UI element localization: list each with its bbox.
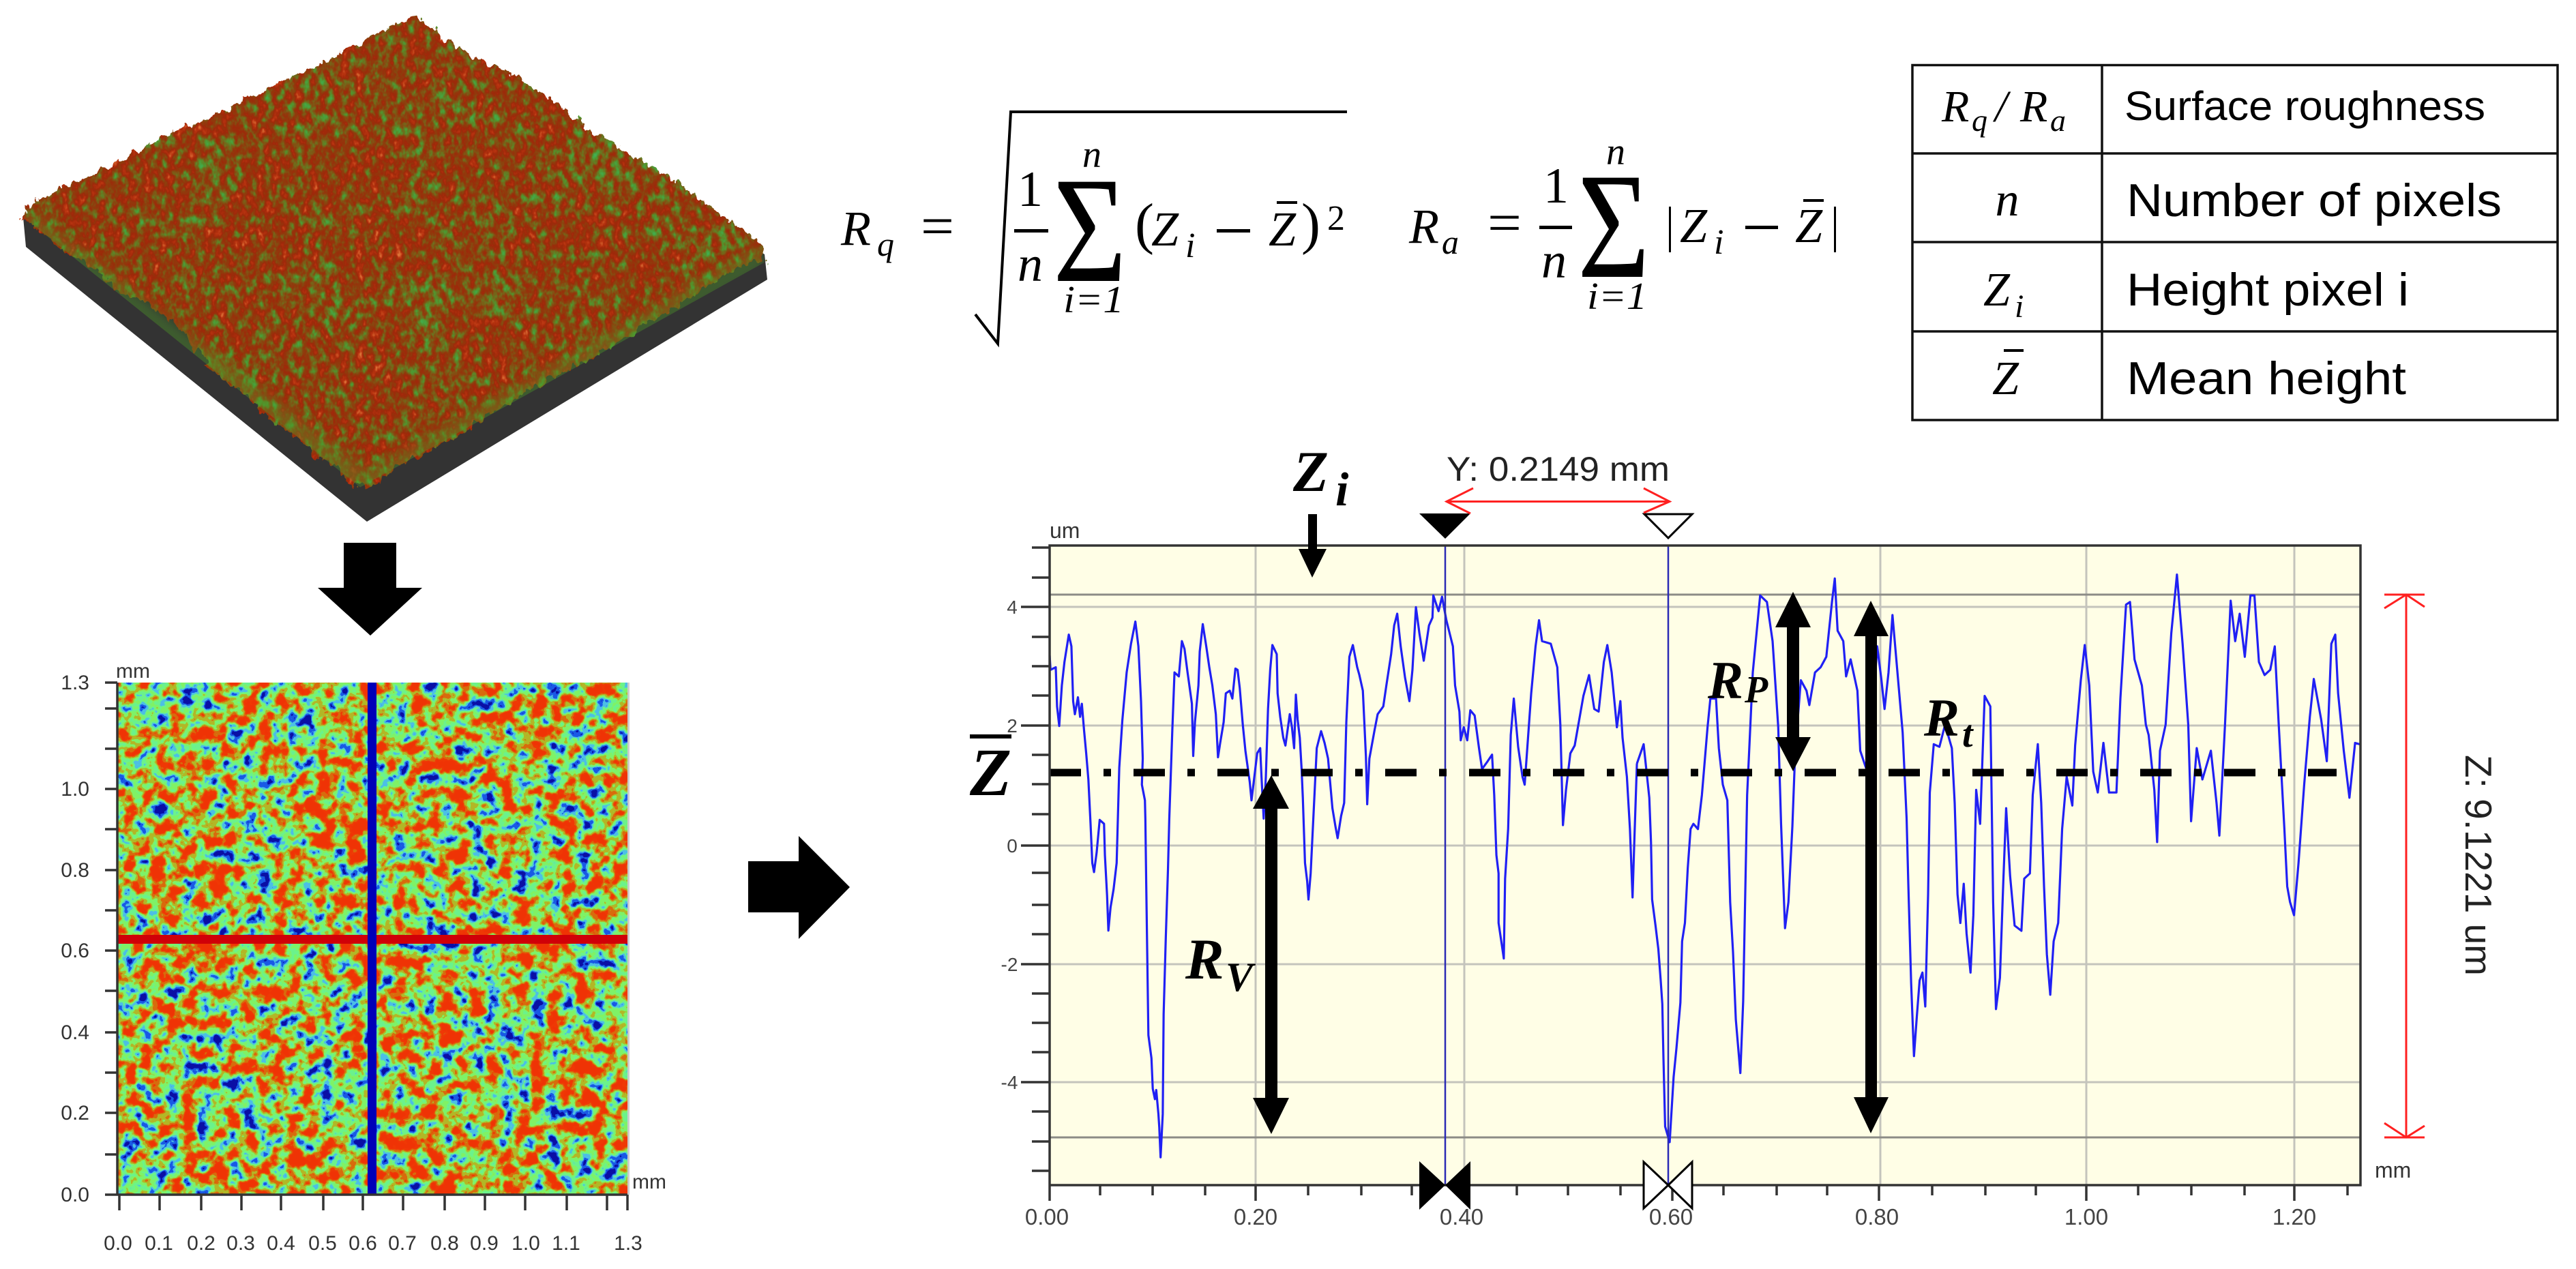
row: mean height: Mean height	[2127, 353, 2406, 404]
row: surface roughness: R	[1941, 82, 1969, 132]
horizontal profile line	[117, 935, 627, 944]
chart x axis labels: 0.20	[1234, 1204, 1277, 1229]
mean height label: Z	[969, 734, 1011, 810]
cursor marker: filled triangle	[1419, 513, 1470, 539]
map unit labels: mm	[632, 1171, 666, 1193]
map y axis labels	[61, 672, 89, 1206]
arrow: height map to profile	[748, 836, 850, 939]
map x axis labels: 0.8	[430, 1232, 459, 1255]
Rp label	[1707, 651, 1768, 711]
Zi arrow	[1299, 514, 1327, 578]
summation: i=1	[1063, 279, 1124, 321]
chart y axis labels: -2	[1001, 954, 1018, 975]
square root sign	[975, 112, 1347, 344]
map y axis labels: 0.6	[61, 940, 89, 962]
summation: i=1	[1587, 275, 1647, 318]
Rq symbol	[840, 201, 894, 263]
Rp label: P	[1744, 669, 1768, 711]
arrow: surface to height map	[318, 543, 422, 636]
Zi label	[1292, 440, 1349, 516]
Ra symbol: a	[1442, 223, 1459, 261]
vertical distance label: Z: 9.1221 um	[2457, 755, 2500, 976]
squared difference term: Z	[1269, 202, 1297, 256]
map x axis labels: 0.1	[145, 1232, 173, 1255]
panel: symbol table	[1912, 65, 2558, 420]
Zi label: Z	[1292, 440, 1329, 504]
map x axis labels: 0.7	[388, 1232, 417, 1255]
fraction 1/n: n	[1541, 233, 1567, 289]
map unit labels	[116, 660, 666, 1193]
row: surface roughness: Surface roughness	[2125, 83, 2485, 129]
Rt label: t	[1962, 713, 1974, 756]
squared difference term: (	[1135, 192, 1154, 256]
row: height pixel i: i	[2015, 288, 2024, 325]
map x axis labels: 0.3	[226, 1232, 255, 1255]
equation: Ra	[1408, 131, 1836, 318]
row: number of pixels: n	[1996, 174, 2019, 226]
Rv label: R	[1185, 927, 1224, 991]
absolute difference term	[1669, 198, 1836, 262]
cursor lines	[1445, 546, 1668, 1185]
equals sign: =	[1487, 192, 1522, 254]
Rv label: V	[1226, 955, 1256, 1000]
cursor marker: filled bowtie	[1419, 1161, 1470, 1210]
height map image	[117, 683, 627, 1195]
map x axis labels: 1.0	[512, 1232, 540, 1255]
Ra symbol	[1408, 199, 1459, 261]
green fringe along front edges	[23, 220, 765, 486]
Rt label: R	[1923, 688, 1959, 747]
chart y axis labels: -4	[1001, 1072, 1018, 1093]
chart x axis labels	[1025, 1204, 2316, 1229]
row: height pixel i	[1983, 264, 2409, 325]
chart x axis labels: 0.40	[1440, 1204, 1483, 1229]
red horizontal dimension arrow	[1447, 488, 1670, 513]
red vertical dimension arrow	[2384, 595, 2425, 1137]
absolute difference term: Z	[1795, 198, 1823, 253]
chart x axis labels: 1.00	[2064, 1204, 2108, 1229]
map x axis labels: 0.5	[308, 1232, 337, 1255]
Rp label: R	[1707, 651, 1743, 710]
vertical profile line	[368, 683, 376, 1195]
map x axis labels: 0.9	[470, 1232, 499, 1255]
summation: n	[1082, 134, 1101, 176]
equation: Rq	[840, 112, 1347, 344]
map x axis labels: 0.4	[267, 1232, 295, 1255]
chart x axis labels: 0.60	[1649, 1204, 1693, 1229]
Rt arrow	[1854, 601, 1889, 1133]
map unit labels: mm	[116, 660, 150, 683]
squared difference term: )	[1301, 192, 1320, 256]
map x axis labels: 0.2	[187, 1232, 216, 1255]
summation: Σ	[1053, 147, 1127, 314]
horizontal distance label: Y: 0.2149 mm	[1447, 450, 1670, 488]
Zi label: i	[1335, 464, 1349, 516]
Rt label	[1923, 688, 1974, 756]
row: mean height	[1992, 349, 2406, 405]
row: surface roughness: /	[1992, 82, 2011, 132]
map y axis labels: 0.4	[61, 1021, 89, 1044]
mean height dash-dot line	[1050, 769, 2337, 776]
chart x axis labels: 0.00	[1025, 1204, 1069, 1229]
plot frame and ticks	[1021, 546, 2360, 1201]
right map edge	[627, 683, 630, 1195]
row: number of pixels	[1996, 174, 2502, 226]
chart unit labels: mm	[2375, 1158, 2411, 1182]
Rv label	[1185, 927, 1256, 1000]
chart x axis labels: 1.20	[2272, 1204, 2316, 1229]
absolute difference term: i	[1714, 223, 1723, 262]
profile curve	[1050, 575, 2360, 1157]
rough surface top	[23, 16, 765, 488]
table grid	[1912, 65, 2558, 420]
absolute difference term: Z	[1680, 198, 1708, 253]
map x axis labels	[104, 1232, 642, 1255]
Ra symbol: R	[1408, 199, 1439, 254]
map axes and ticks	[105, 683, 627, 1210]
panel: height profile chart	[969, 440, 2500, 1229]
chart y axis labels: 2	[1007, 715, 1018, 736]
equals sign: =	[921, 195, 954, 257]
map y axis labels: 1.0	[61, 778, 89, 801]
Rq symbol: q	[877, 225, 894, 263]
row: number of pixels: Number of pixels	[2127, 175, 2502, 226]
chart unit labels	[1050, 518, 2411, 1182]
row: mean height: Z	[1992, 353, 2019, 405]
fraction 1/n	[1014, 162, 1048, 293]
chart unit labels: um	[1050, 518, 1080, 543]
map y axis labels: 0.2	[61, 1102, 89, 1124]
row: surface roughness: a	[2050, 103, 2066, 138]
peak and valley reference lines	[1050, 595, 2360, 1137]
summation: n	[1606, 131, 1625, 173]
surface base side walls	[23, 41, 767, 522]
row: height pixel i: Z	[1983, 264, 2011, 316]
chart y axis labels: 0	[1007, 835, 1018, 856]
chart y axis labels: 4	[1007, 597, 1018, 618]
row: surface roughness: q	[1972, 103, 1987, 138]
squared difference term: 2	[1327, 199, 1345, 238]
chart x axis labels: 0.80	[1855, 1204, 1899, 1229]
fraction 1/n	[1539, 158, 1572, 289]
squared difference term: i	[1185, 226, 1195, 265]
panel: 2D height map	[61, 660, 666, 1255]
fraction 1/n: 1	[1543, 158, 1569, 214]
row: surface roughness: R	[2019, 82, 2047, 132]
fraction 1/n: n	[1018, 237, 1043, 293]
plot background	[1050, 546, 2360, 1185]
summation: Σ	[1578, 143, 1650, 310]
map x axis labels: 0.0	[104, 1232, 132, 1255]
squared difference term	[1135, 192, 1345, 265]
map y axis labels: 0.8	[61, 859, 89, 882]
Rp arrow	[1775, 592, 1811, 771]
cursor marker: open bowtie	[1644, 1162, 1692, 1208]
chart y axis labels	[1001, 597, 1018, 1093]
map y axis labels: 1.3	[61, 672, 89, 694]
grid lines	[1050, 546, 2360, 1185]
cursor marker: open triangle	[1644, 514, 1692, 538]
3D surface topography	[23, 16, 767, 522]
Rv arrow	[1253, 775, 1289, 1134]
fraction 1/n: 1	[1018, 162, 1043, 218]
map x axis labels: 1.3	[614, 1232, 642, 1255]
squared difference term: Z	[1151, 202, 1179, 256]
map x axis labels: 1.1	[552, 1232, 580, 1255]
row: surface roughness	[1941, 82, 2485, 138]
map x axis labels: 0.6	[349, 1232, 377, 1255]
row: height pixel i: Height pixel i	[2127, 264, 2409, 316]
map y axis labels: 0.0	[61, 1184, 89, 1206]
Rq symbol: R	[840, 201, 871, 256]
